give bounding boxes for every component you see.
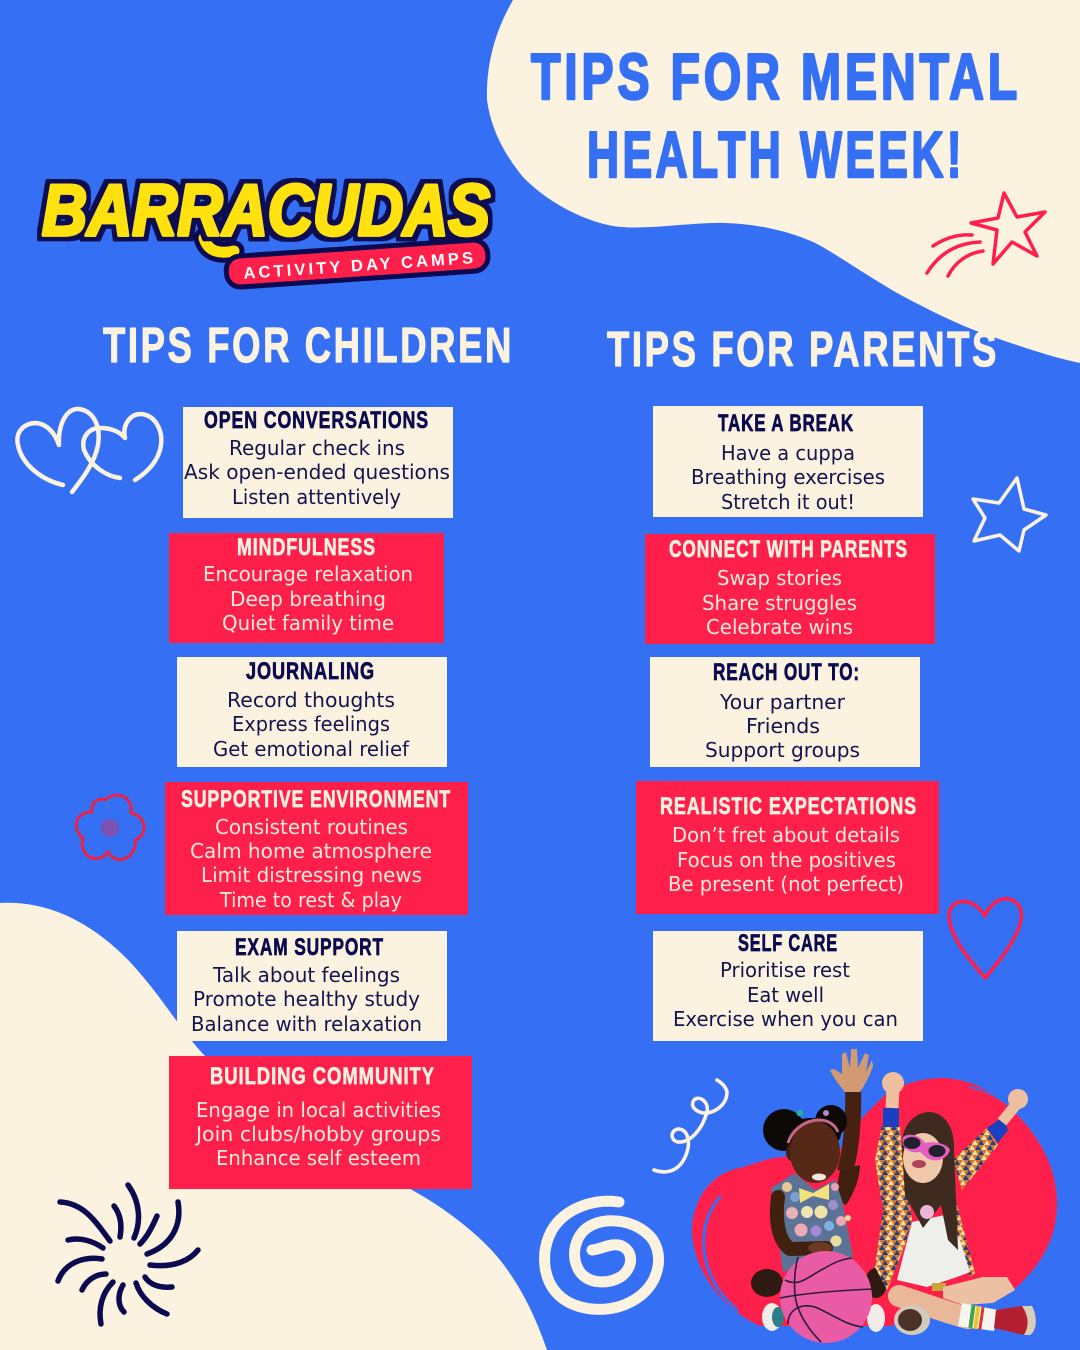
card: connect with parents: Share struggles bbox=[702, 591, 857, 615]
icon: cream squiggle bbox=[654, 1080, 727, 1172]
card: journaling: Record thoughts bbox=[227, 688, 395, 712]
card: self care: Eat well bbox=[747, 983, 824, 1007]
right child bbox=[875, 1072, 1036, 1335]
card: journaling: Express feelings bbox=[232, 712, 390, 736]
card: reach out to: Your partner bbox=[719, 690, 846, 714]
card: self care: Prioritise rest bbox=[720, 958, 850, 982]
card: open conversations: Ask open-ended questions bbox=[184, 460, 450, 484]
card: supportive environment: Consistent routines bbox=[215, 815, 408, 839]
card: supportive environment: Calm home atmosphere bbox=[190, 839, 432, 863]
card: take a break: TAKE A BREAK bbox=[718, 410, 854, 437]
card: open conversations: Regular check ins bbox=[229, 436, 405, 460]
card: take a break: Breathing exercises bbox=[691, 465, 885, 489]
card: building community bbox=[169, 1056, 472, 1189]
card: self care: SELF CARE bbox=[738, 930, 838, 957]
card: connect with parents: Swap stories bbox=[717, 566, 842, 590]
card: realistic expectations: Don’t fret about details bbox=[672, 823, 900, 847]
card: supportive environment: Limit distressing news bbox=[201, 863, 422, 887]
card: self care: Exercise when you can bbox=[673, 1007, 898, 1031]
pink basketball bbox=[780, 1251, 872, 1343]
card: mindfulness bbox=[169, 533, 444, 643]
card: open conversations: Listen attentively bbox=[232, 485, 401, 509]
card: exam support bbox=[177, 931, 447, 1041]
card: realistic expectations bbox=[636, 781, 939, 914]
card: take a break: Stretch it out! bbox=[721, 490, 855, 514]
card: supportive environment: Time to rest & play bbox=[219, 888, 402, 912]
card: open conversations bbox=[183, 407, 453, 518]
icon: red shooting star bbox=[927, 193, 1045, 276]
icon: cream spiral bbox=[545, 1201, 659, 1309]
card: journaling: JOURNALING bbox=[246, 658, 375, 685]
cream blob: bottom left bbox=[0, 903, 547, 1350]
card: reach out to: Friends bbox=[746, 714, 820, 738]
card: take a break: Have a cuppa bbox=[721, 441, 855, 465]
card: supportive environment bbox=[165, 782, 468, 915]
card: mindfulness: Quiet family time bbox=[222, 611, 394, 635]
card: open conversations: OPEN CONVERSATIONS bbox=[204, 407, 429, 434]
card: exam support: EXAM SUPPORT bbox=[235, 934, 384, 961]
card: exam support: Promote healthy study bbox=[193, 987, 420, 1011]
logo: Barracudas bbox=[42, 171, 490, 288]
card: realistic expectations: Focus on the positives bbox=[677, 848, 896, 872]
card: building community: Join clubs/hobby groups bbox=[194, 1122, 441, 1146]
title bbox=[531, 40, 1021, 191]
card: realistic expectations: Be present (not perfect) bbox=[668, 872, 904, 896]
illustration: two children with ball on red blob bbox=[692, 1049, 1057, 1343]
blob stripes bbox=[704, 1087, 1008, 1310]
card: connect with parents: Celebrate wins bbox=[706, 615, 853, 639]
card: reach out to: Support groups bbox=[705, 738, 860, 762]
card: mindfulness: MINDFULNESS bbox=[237, 534, 376, 561]
logo: Barracudas: ACTIVITY DAY CAMPS bbox=[243, 249, 474, 283]
card: building community: Enhance self esteem bbox=[216, 1146, 421, 1170]
logo: Barracudas: BARRACUDAS bbox=[42, 171, 490, 251]
card: self care bbox=[653, 930, 923, 1041]
red blob bbox=[692, 1078, 1057, 1326]
card: take a break bbox=[653, 406, 923, 517]
card: building community: BUILDING COMMUNITY bbox=[210, 1063, 435, 1090]
card: building community: Engage in local activities bbox=[196, 1098, 441, 1122]
icon: red flower bbox=[76, 795, 144, 860]
icon: navy sunburst bbox=[58, 1185, 198, 1324]
card: journaling: Get emotional relief bbox=[213, 737, 410, 761]
card: connect with parents: CONNECT WITH PARENTS bbox=[669, 536, 908, 563]
card: mindfulness: Encourage relaxation bbox=[203, 562, 413, 586]
left child bbox=[751, 1049, 887, 1332]
card: journaling bbox=[177, 657, 447, 767]
card: reach out to bbox=[650, 657, 920, 767]
icon: red heart bbox=[949, 899, 1021, 978]
icon: white hearts bbox=[17, 409, 161, 492]
card: realistic expectations: REALISTIC EXPECTATIONS bbox=[660, 793, 917, 820]
card: connect with parents bbox=[645, 534, 935, 644]
card: mindfulness: Deep breathing bbox=[230, 587, 386, 611]
card: exam support: Talk about feelings bbox=[212, 963, 400, 987]
icon: white star bbox=[973, 478, 1046, 551]
cream blob: top right bbox=[487, 0, 1080, 363]
card: exam support: Balance with relaxation bbox=[191, 1012, 422, 1036]
card: supportive environment: SUPPORTIVE ENVIRONMENT bbox=[181, 786, 451, 813]
heading: tips for children: TIPS FOR CHILDREN bbox=[103, 319, 514, 373]
card: reach out to: REACH OUT TO: bbox=[713, 659, 860, 686]
